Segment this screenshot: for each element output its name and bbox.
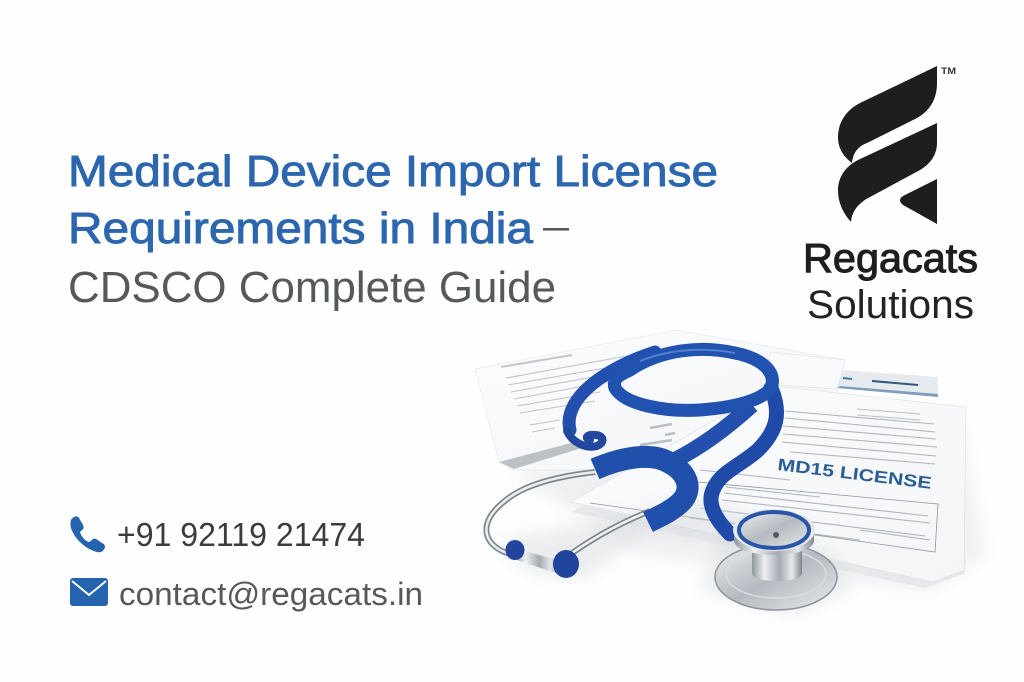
neck xyxy=(752,535,802,581)
logo wordmark Regacats: Regacats xyxy=(803,235,978,281)
bell centre xyxy=(773,532,779,538)
illustration: stethoscope on license documents xyxy=(475,330,985,615)
main license document xyxy=(571,386,966,588)
phone number: +91 92119 21474 xyxy=(117,516,365,553)
ear piece metal xyxy=(514,549,560,573)
diaphragm base xyxy=(715,544,837,610)
right tube xyxy=(711,388,777,534)
blue tag on folder xyxy=(837,370,938,397)
shadow under documents xyxy=(510,425,985,590)
logo wordmark Solutions: Solutions xyxy=(807,283,974,327)
icon: phone xyxy=(70,516,105,552)
email address: contact@regacats.in xyxy=(119,576,423,612)
metal arm lower xyxy=(568,511,650,556)
stethoscope xyxy=(486,349,837,610)
email contact xyxy=(70,576,423,612)
title line 1: Medical Device Import License xyxy=(68,147,718,196)
middle tube xyxy=(675,405,752,460)
metal binaural arm xyxy=(486,472,595,555)
title dash xyxy=(543,228,569,231)
phone contact xyxy=(70,516,365,553)
tube loop xyxy=(614,349,772,410)
upper left tube xyxy=(569,352,655,430)
logo mark xyxy=(838,66,937,224)
shadow under stethoscope xyxy=(500,500,850,615)
title line 3: CDSCO Complete Guide xyxy=(68,263,556,312)
chest piece xyxy=(715,509,837,610)
logo: Regacats Solutions xyxy=(803,66,978,327)
back document left xyxy=(475,330,845,470)
document text lines xyxy=(690,411,937,540)
small upper document xyxy=(760,352,845,389)
trademark: TM xyxy=(941,66,956,76)
ear hook xyxy=(567,431,603,447)
bell xyxy=(734,530,814,555)
document form box xyxy=(590,481,938,552)
bell rim xyxy=(733,509,815,551)
diaphragm inner ring xyxy=(726,550,826,598)
Y yoke xyxy=(595,457,688,522)
title line 2: Requirements in India xyxy=(68,204,534,253)
icon: envelope xyxy=(70,578,108,606)
ear tips xyxy=(506,540,579,578)
document heading: MD15 LICENSE xyxy=(777,455,933,493)
title xyxy=(68,147,718,312)
